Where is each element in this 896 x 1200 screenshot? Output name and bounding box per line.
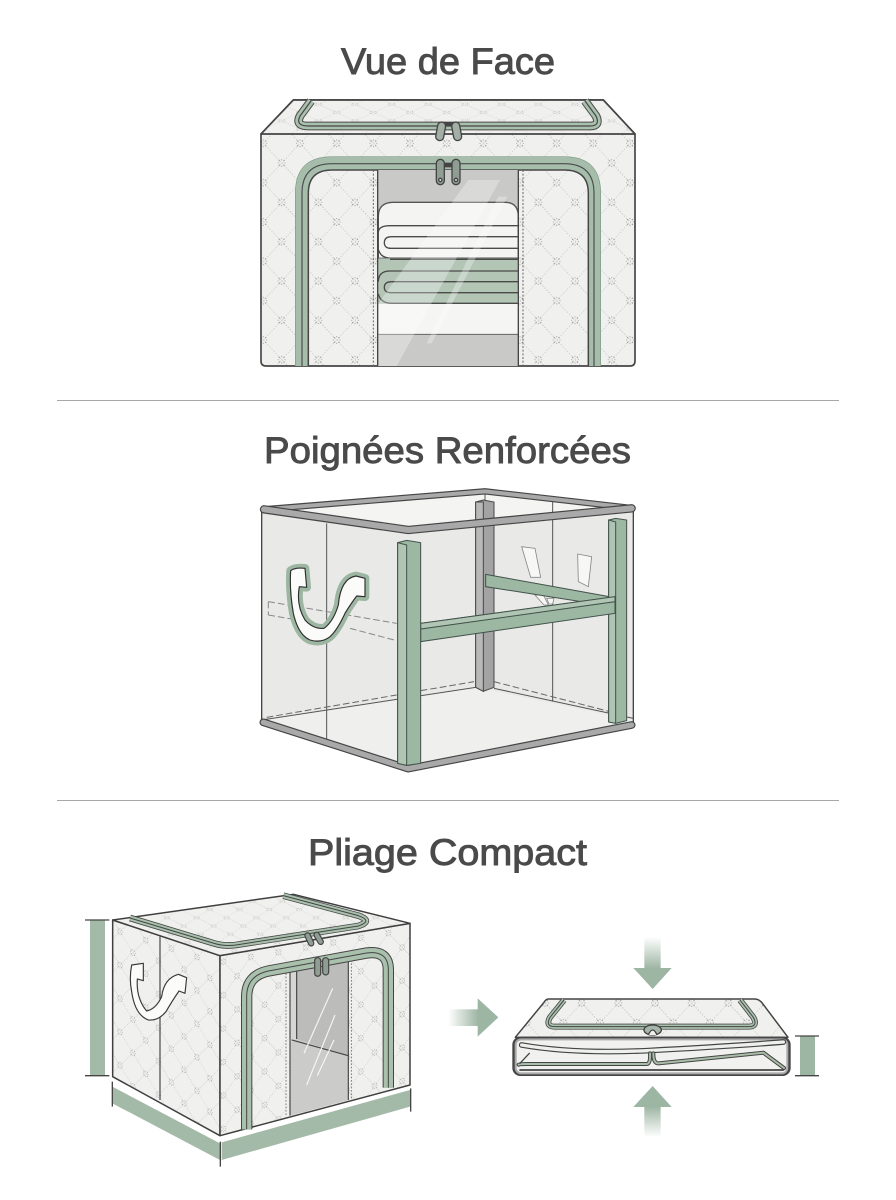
glass reflection — [378, 180, 500, 366]
translucent box walls — [262, 489, 633, 770]
left face — [113, 920, 220, 1136]
flat box front — [514, 1038, 789, 1075]
top face — [113, 894, 410, 956]
white base layer — [378, 304, 518, 334]
flat box top face — [515, 999, 788, 1037]
arrow: push up — [633, 1086, 672, 1137]
top opening — [262, 489, 633, 532]
front zipper arch — [247, 953, 388, 1129]
window left strip — [290, 971, 297, 1043]
illustration: folded flat box with arrows — [448, 937, 819, 1137]
window edges — [378, 170, 518, 366]
front zipper pulls — [315, 958, 329, 976]
zipper pull — [644, 1025, 661, 1035]
box body — [261, 100, 635, 366]
fold lines of green towel — [378, 259, 518, 303]
title: Pliage Compact: Pliage Compact — [308, 832, 588, 873]
handle green halo — [290, 568, 365, 641]
left seam — [158, 937, 162, 1100]
right face — [220, 923, 410, 1136]
illustration: open box with dimensions — [85, 894, 411, 1167]
title: Vue de Face: Vue de Face — [341, 41, 555, 82]
carry handle — [130, 963, 187, 1020]
arrow: transition right — [448, 998, 498, 1037]
lid zipper band — [130, 896, 366, 946]
lid zipper band — [548, 1000, 755, 1027]
vertical fabric seams — [327, 493, 553, 740]
rim — [263, 491, 632, 769]
floor — [262, 687, 633, 770]
top face — [261, 100, 635, 134]
folded white towel — [378, 202, 518, 258]
illustration: reinforced frame and handles — [262, 489, 633, 770]
glass reflections — [304, 988, 335, 1085]
stitched seams — [373, 170, 523, 366]
flat box rim — [516, 1039, 787, 1073]
front zipper arch — [295, 157, 601, 366]
divider — [57, 400, 839, 401]
illustration: front view of storage box — [261, 100, 635, 366]
stitched seams — [286, 960, 351, 1117]
back post — [476, 500, 494, 691]
base line — [378, 333, 518, 336]
folded green towel — [378, 258, 518, 303]
window floor — [290, 1039, 348, 1116]
front green bar — [421, 597, 615, 642]
divider — [57, 800, 839, 801]
lid zipper pulls — [304, 931, 324, 947]
folded layers — [519, 1042, 784, 1070]
glass streak — [427, 197, 507, 343]
wall outline — [262, 507, 633, 725]
depth dimension bar — [112, 1082, 411, 1167]
back green bar — [486, 574, 613, 602]
lid zipper pulls — [435, 121, 462, 141]
window inner lines — [290, 960, 348, 1116]
dashed tube — [268, 602, 397, 641]
lid zipper band — [299, 101, 597, 126]
arrow: push down — [633, 937, 672, 989]
right green post — [609, 518, 627, 723]
window back wall — [290, 960, 348, 1116]
floor edges — [262, 687, 633, 720]
rear handle straps — [522, 547, 592, 605]
side handle — [290, 568, 365, 641]
front green post — [398, 540, 421, 765]
dashed floor guides — [267, 682, 610, 717]
title: Poignées Renforcées: Poignées Renforcées — [264, 430, 631, 471]
handle strap — [290, 568, 365, 641]
clear window — [378, 170, 518, 366]
fold lines of white towel — [378, 226, 518, 258]
height dimension bar — [85, 920, 109, 1076]
folded height dimension — [795, 1036, 819, 1076]
front zipper pulls — [436, 159, 460, 185]
